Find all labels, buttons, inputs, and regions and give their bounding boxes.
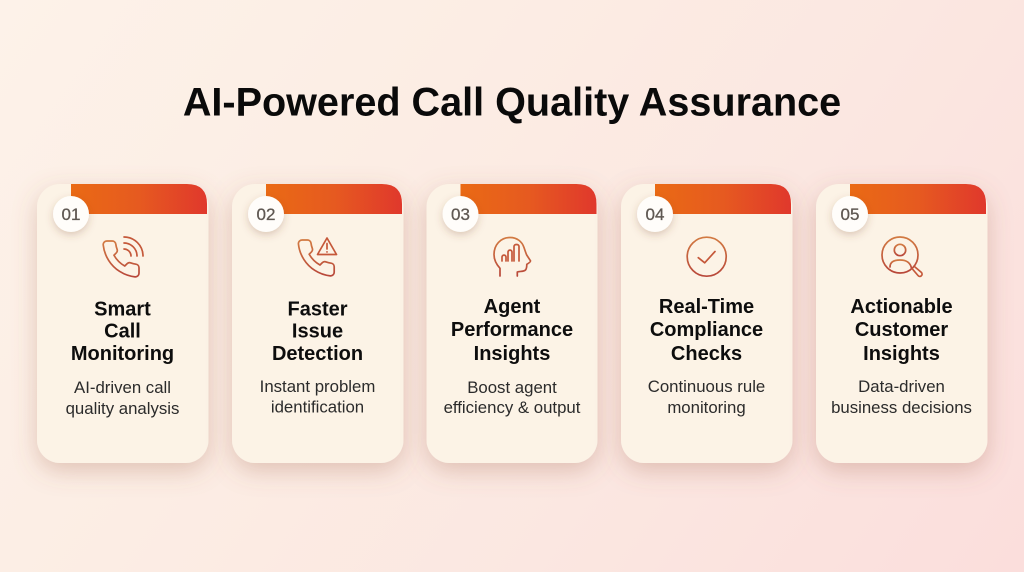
card heading: Agent (484, 296, 541, 318)
panel: Real-Time Compliance Checks (621, 184, 792, 463)
card heading: Compliance (650, 319, 763, 341)
card heading (71, 298, 174, 365)
card description: Instant problem (260, 377, 375, 396)
number badge 02 (248, 196, 284, 232)
card heading: Detection (272, 343, 363, 365)
card description: quality analysis (66, 399, 179, 418)
card background (426, 184, 598, 463)
card heading: Checks (671, 343, 742, 365)
panel: Agent Performance Insights (426, 184, 598, 463)
card background (621, 184, 792, 463)
card description (831, 377, 972, 417)
header bar (655, 184, 791, 214)
icon: phone with signal waves (103, 237, 143, 277)
card description: business decisions (831, 398, 972, 417)
card description: AI-driven call (74, 378, 171, 397)
card heading: Customer (855, 319, 948, 341)
card heading (850, 296, 953, 365)
card heading: Insights (863, 343, 940, 365)
panel: Faster Issue Detection (232, 184, 404, 463)
card description (260, 377, 375, 417)
card heading: Insights (474, 343, 550, 365)
card heading: Issue (292, 320, 343, 342)
card background (816, 184, 988, 463)
number badge 04 (637, 196, 673, 232)
card description (66, 378, 179, 418)
number badge 01 (53, 196, 89, 232)
card heading: Actionable (850, 296, 953, 318)
card description: monitoring (667, 398, 746, 417)
icon: person in magnifier (882, 237, 922, 276)
number badge 03: 03 (451, 205, 470, 224)
card background (37, 184, 208, 463)
number badge 05: 05 (841, 205, 859, 224)
header bar (850, 184, 986, 214)
number badge 03 (442, 196, 478, 232)
card description: Data-driven (858, 377, 945, 396)
panel: Smart Call Monitoring (37, 184, 208, 463)
number badge 05 (832, 196, 868, 232)
card heading (451, 296, 573, 365)
panel: Actionable Customer Insights (816, 184, 988, 463)
card background (232, 184, 404, 463)
number badge 04: 04 (646, 205, 664, 224)
card heading: Call (104, 320, 141, 342)
card heading: Monitoring (71, 343, 174, 365)
card description (648, 377, 765, 417)
card heading: Smart (94, 298, 151, 320)
card heading: Faster (287, 298, 348, 320)
card heading (272, 298, 363, 365)
icon: check mark in circle (687, 237, 726, 276)
header bar (266, 184, 402, 214)
icon: phone with warning triangle (298, 238, 336, 276)
icon: head with bar chart (494, 238, 531, 276)
card heading: Performance (451, 319, 573, 341)
card description: identification (271, 398, 364, 417)
card description: Continuous rule (648, 377, 765, 396)
card heading (650, 296, 763, 365)
card description (444, 378, 581, 417)
card description: Boost agent (467, 378, 557, 397)
number badge 01: 01 (62, 205, 80, 224)
card description: efficiency & output (444, 398, 581, 417)
header bar (460, 184, 596, 214)
card heading: Real-Time (659, 296, 754, 318)
header bar (71, 184, 207, 214)
title: AI-Powered Call Quality Assurance (183, 80, 841, 124)
number badge 02: 02 (257, 205, 275, 224)
